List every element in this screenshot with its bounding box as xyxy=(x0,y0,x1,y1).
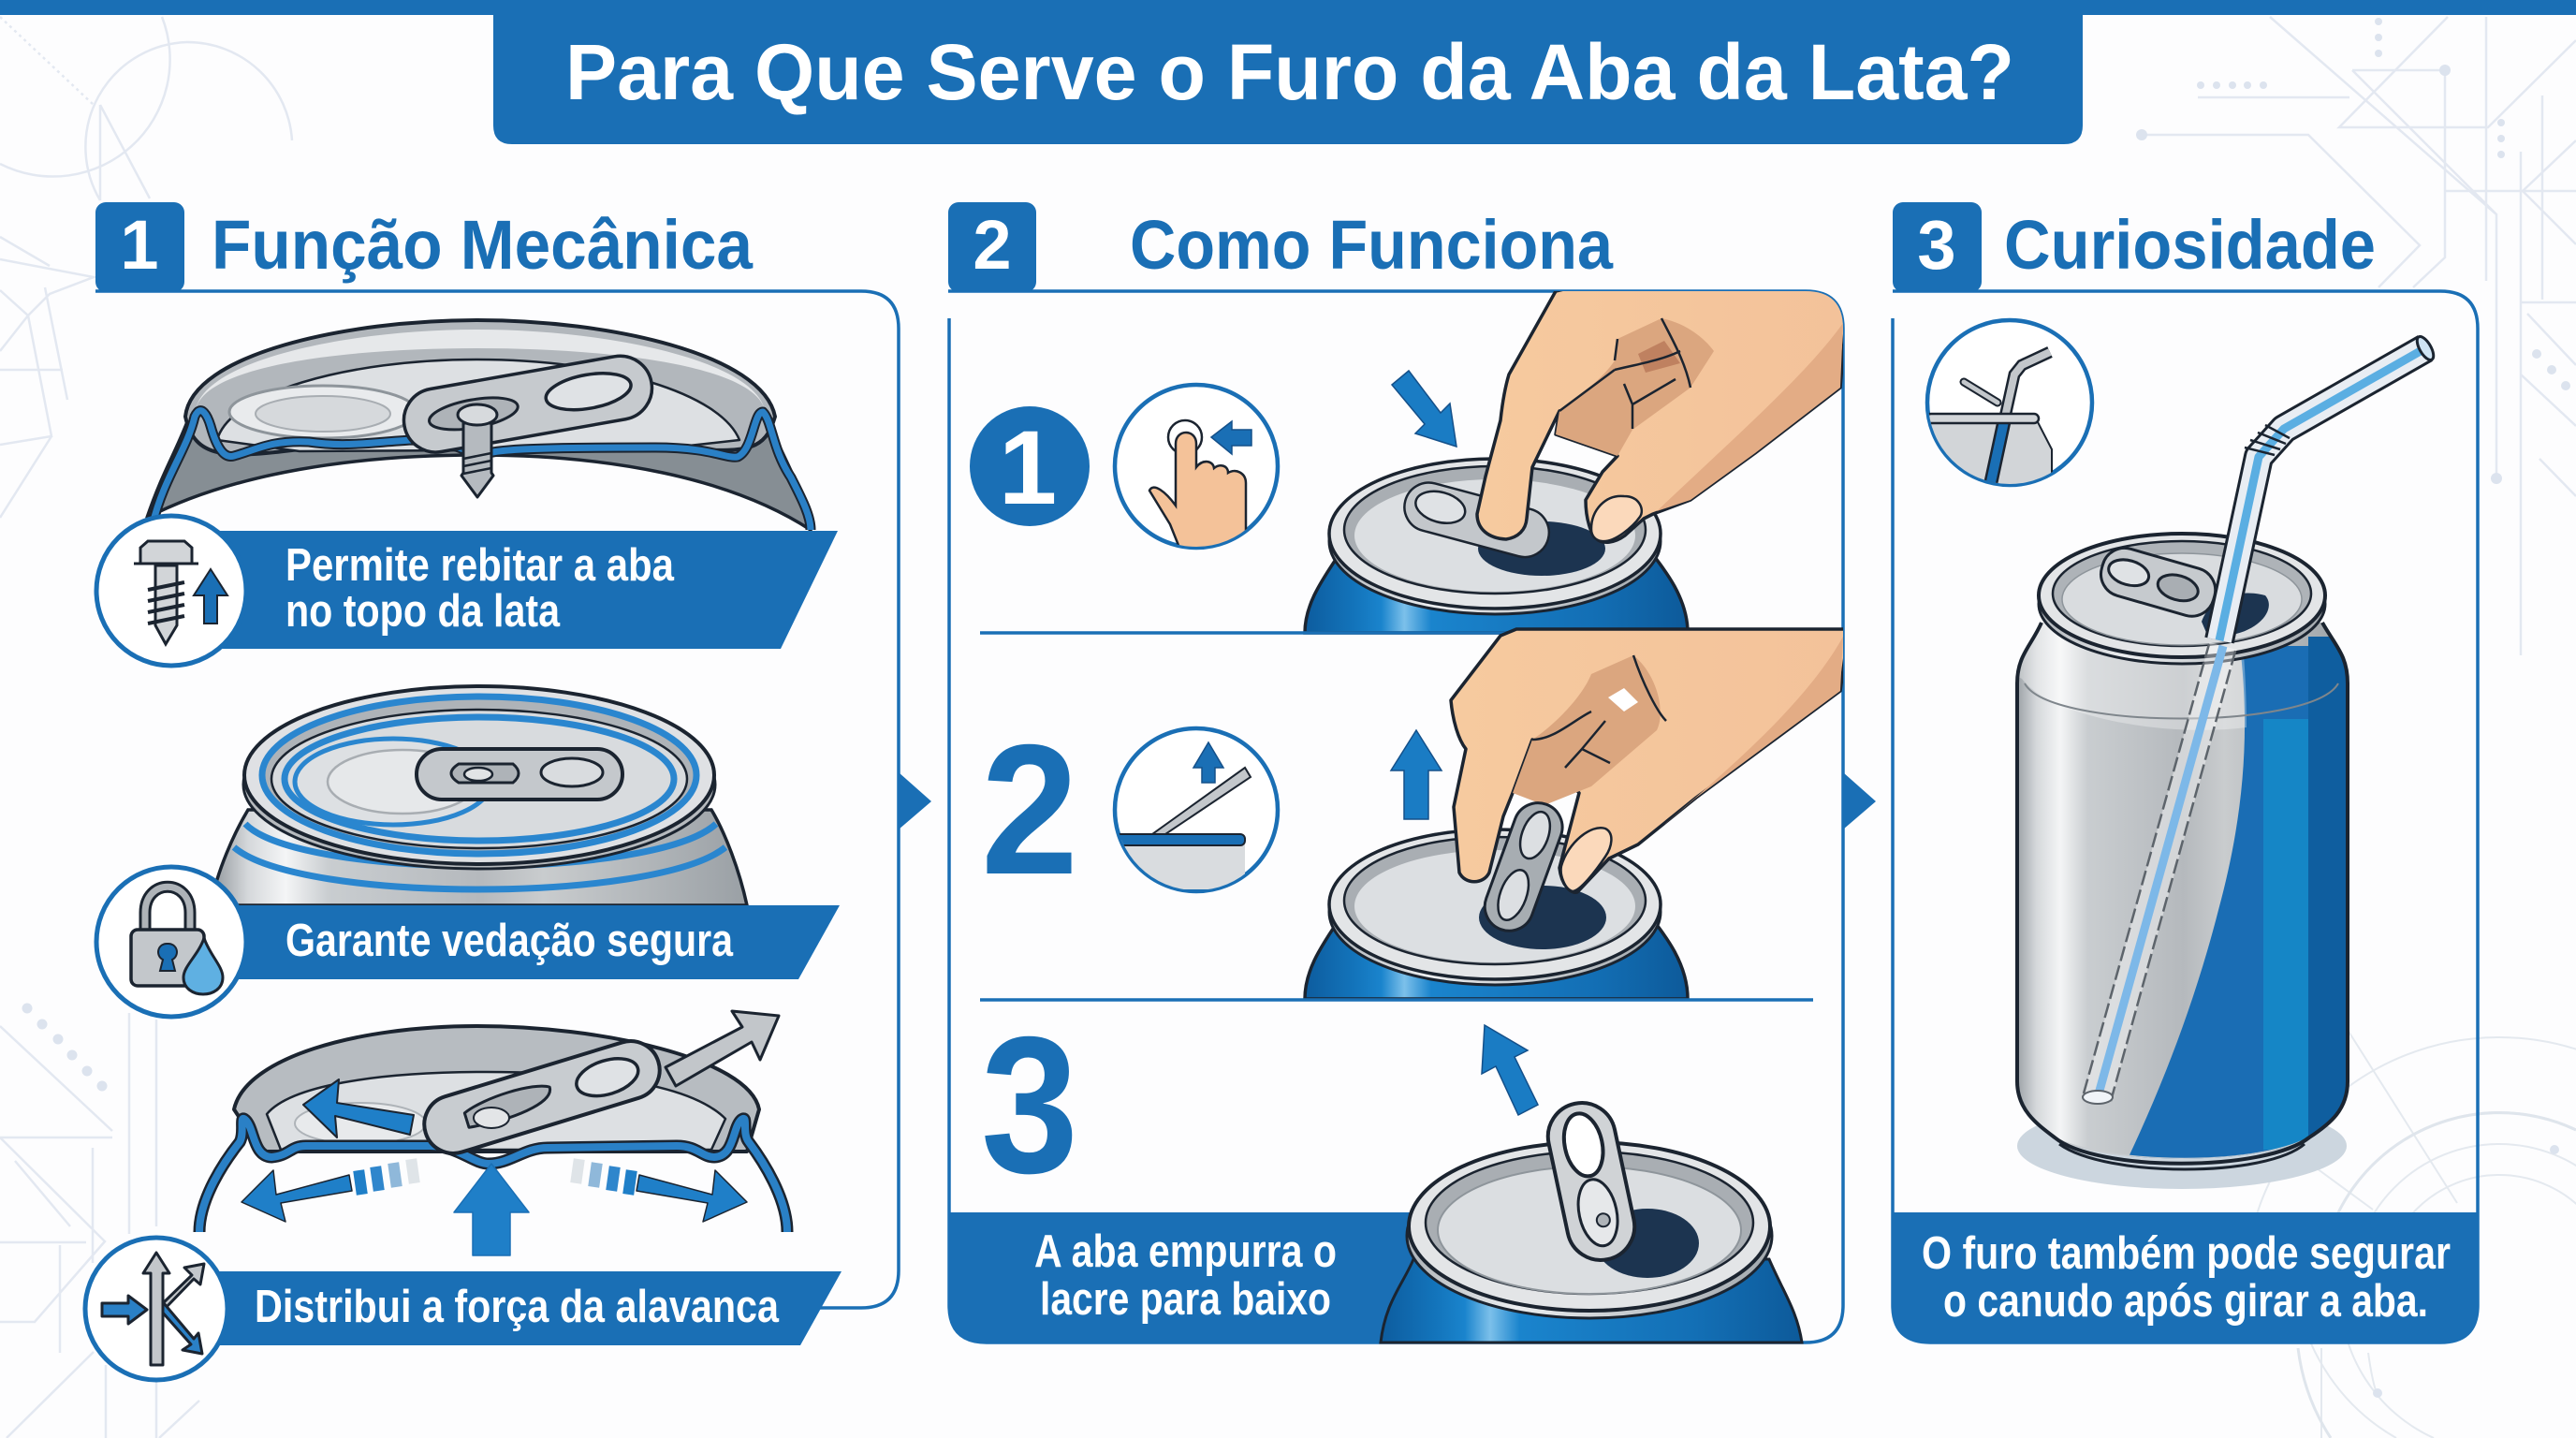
heading number badge xyxy=(95,202,184,292)
step 2 number: 2 xyxy=(981,706,1078,913)
caption band xyxy=(949,1212,1498,1343)
heading number badge: 2 xyxy=(973,206,1012,284)
title text: Para Que Serve o Furo da Aba da Lata? xyxy=(565,28,2014,116)
can body xyxy=(2019,623,2346,1159)
arrow: pull up xyxy=(1482,1025,1538,1115)
step 3 xyxy=(949,997,1802,1343)
panel: curiosidade xyxy=(1893,202,2478,1343)
heading number badge: 1 xyxy=(120,206,159,284)
step 1 number: 1 xyxy=(999,409,1057,526)
heading number badge xyxy=(1893,202,1982,292)
illustration: can with pinched tab xyxy=(1305,629,1849,999)
caption text: o canudo após girar a aba. xyxy=(1943,1276,2428,1327)
illustration: can with opened tab xyxy=(1381,1096,1802,1343)
heading: curiosidade: Curiosidade xyxy=(2004,206,2376,284)
icon band 3 xyxy=(85,1238,842,1380)
icon band 2 xyxy=(96,867,840,1017)
caption text: O furo também pode segurar xyxy=(1922,1228,2451,1279)
illustration: sealed can top xyxy=(211,686,747,905)
straw above rim with bend xyxy=(2219,334,2437,640)
step 3 number: 3 xyxy=(981,997,1078,1214)
icon: screw with arrow xyxy=(96,516,246,666)
heading: como funciona: Como Funciona xyxy=(1130,206,1614,284)
panel outline xyxy=(1893,291,2478,1343)
can shadow xyxy=(2017,1103,2347,1189)
step 1 xyxy=(970,286,1849,633)
illustration: can with straw xyxy=(2012,334,2437,1189)
caption band xyxy=(1893,1212,2478,1343)
band text 1: no topo da lata xyxy=(285,586,561,637)
band text 3: Distribui a força da alavanca xyxy=(255,1282,780,1332)
band text 1 xyxy=(285,540,675,637)
icon: finger press xyxy=(1115,385,1278,552)
caption text: lacre para baixo xyxy=(1040,1274,1331,1325)
caption text xyxy=(1034,1226,1337,1325)
heading number badge: 3 xyxy=(1917,206,1956,284)
step 2 xyxy=(980,629,1849,1000)
illustration: riveted lid cross-section xyxy=(147,320,811,530)
icon: padlock with water drop xyxy=(96,867,246,1017)
panel outline xyxy=(948,291,1843,1343)
illustration: can with finger on tab xyxy=(1305,286,1849,633)
icon: force arrows xyxy=(85,1238,227,1380)
caption text: A aba empurra o xyxy=(1034,1226,1337,1277)
heading: função mecânica: Função Mecânica xyxy=(212,206,754,284)
icon: straw through tab xyxy=(1926,320,2092,487)
band text 1: Permite rebitar a aba xyxy=(285,540,675,591)
divider xyxy=(980,631,1813,635)
illustration: force distribution lid xyxy=(199,1011,787,1255)
icon band 1 xyxy=(96,516,838,666)
straw inside can xyxy=(2083,644,2236,1104)
arrow between panels 1 and 2 xyxy=(899,772,931,829)
panel outline xyxy=(95,291,899,1308)
arrow: press down xyxy=(1392,371,1456,447)
pull tab xyxy=(2096,543,2220,622)
icon: lever up xyxy=(1114,728,1278,891)
arrow: lift up xyxy=(1391,730,1442,819)
arrow between panels 2 and 3 xyxy=(1843,772,1876,829)
band text 2: Garante vedação segura xyxy=(285,916,734,966)
top bar xyxy=(0,0,2576,15)
title banner xyxy=(493,0,2083,144)
can rim and top xyxy=(2039,544,2325,664)
step 1 number xyxy=(970,406,1090,526)
panel: função mecânica xyxy=(85,202,899,1380)
divider xyxy=(980,998,1813,1002)
panel: como funciona xyxy=(948,202,1849,1343)
caption text xyxy=(1922,1228,2451,1327)
heading number badge xyxy=(948,202,1036,292)
